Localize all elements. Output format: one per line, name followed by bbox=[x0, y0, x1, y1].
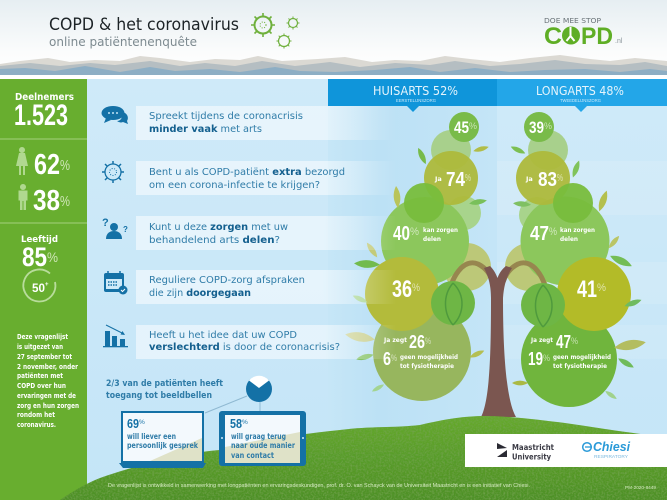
tree: left canopy circles bbox=[365, 112, 491, 401]
chart values: longarts: 47 bbox=[530, 223, 549, 245]
chart values: longarts: geen mogelijkheid bbox=[553, 353, 611, 361]
tablet: oude manier van contact: naar oude manier bbox=[231, 441, 295, 450]
logo: doe mee stop COPD: C bbox=[544, 23, 562, 50]
stat: women: 62 bbox=[34, 149, 60, 181]
text block: survey description: 27 september tot bbox=[17, 353, 73, 361]
icon: person with question marks bbox=[102, 217, 128, 239]
tree: green inner circles bbox=[431, 281, 565, 327]
chart values: longarts: Ja bbox=[525, 175, 533, 183]
chart values: longarts: 83 bbox=[538, 169, 557, 191]
logo: Chiesi Respiratory bbox=[583, 439, 630, 459]
chart values: huisarts: 40 bbox=[393, 223, 410, 245]
tablet: oude manier van contact: % bbox=[242, 419, 248, 426]
question band: 5 bbox=[136, 325, 396, 359]
question band: 2: om een corona-infectie te krijgen? bbox=[149, 180, 320, 191]
logo: doe mee stop COPD: .nl bbox=[615, 38, 623, 45]
tablet: oude manier van contact: van contact bbox=[231, 451, 274, 460]
title bbox=[49, 15, 239, 49]
panel: main background bbox=[87, 79, 667, 500]
question band: 4 bbox=[136, 270, 396, 304]
stat: age: % bbox=[47, 249, 58, 265]
text block: survey description: Deze vragenlijst bbox=[17, 333, 69, 341]
chart values: longarts: 19 bbox=[528, 349, 543, 369]
laptop: persoonlijk gesprek: persoonlijk gesprek bbox=[127, 441, 199, 450]
tablet: oude manier van contact: 58 bbox=[230, 416, 242, 431]
stat: age: + bbox=[45, 282, 49, 288]
stat: age: 85 bbox=[22, 242, 47, 272]
question band: 3: behandelend arts delen? bbox=[149, 235, 280, 246]
column header: huisarts bbox=[328, 79, 497, 112]
text block: survey description: patiënten met bbox=[17, 372, 64, 380]
laptop: persoonlijk gesprek: will liever een bbox=[127, 432, 176, 441]
stat: age: 50 bbox=[32, 281, 45, 295]
question band: 5: Heeft u het idee dat uw COPD bbox=[149, 330, 297, 341]
chart values: huisarts bbox=[383, 118, 477, 370]
question band: 2: Bent u als COPD-patiënt extra bezorgd bbox=[149, 167, 345, 178]
chart values: huisarts: % bbox=[425, 336, 431, 346]
chart values: huisarts: tot fysiotherapie bbox=[400, 362, 455, 370]
heading: video calling bbox=[106, 379, 223, 401]
question band: 4: die zijn doorgegaan bbox=[149, 288, 251, 299]
question band: 5: verslechterd is door de coronacrisis? bbox=[149, 342, 340, 353]
laptop: persoonlijk gesprek: % bbox=[139, 419, 145, 426]
chart values: longarts: 39 bbox=[529, 118, 544, 137]
question band: 1: minder vaak met arts bbox=[149, 124, 262, 135]
chart values: longarts: % bbox=[549, 226, 557, 238]
icon: envelope circle with connectors bbox=[205, 376, 272, 413]
chart values: huisarts: % bbox=[469, 121, 477, 131]
logo: Chiesi Respiratory: RESPIRATORY bbox=[594, 454, 628, 459]
icon: declining bar chart bbox=[103, 325, 128, 347]
text block: survey description: 2 november, onder bbox=[17, 363, 78, 371]
stat: men: % bbox=[60, 193, 70, 210]
stat: age: Leeftijd bbox=[21, 235, 58, 245]
chart values: longarts: 47 bbox=[556, 332, 571, 352]
chart values: huisarts: delen bbox=[423, 235, 441, 243]
icon: speech bubbles bbox=[102, 106, 128, 124]
logo: doe mee stop COPD: PD bbox=[581, 23, 613, 50]
tree: leaves bbox=[344, 144, 647, 401]
stat: women: % bbox=[60, 157, 70, 174]
question band: 3 bbox=[136, 216, 396, 250]
icon: green viruses bbox=[251, 13, 300, 48]
chart values: longarts: % bbox=[543, 353, 550, 363]
question band: 1 bbox=[136, 106, 396, 140]
text block: survey description: ervaringen met de bbox=[17, 392, 76, 400]
stat: participants: 1.523 bbox=[14, 99, 68, 132]
text block: survey description: rondom het bbox=[17, 411, 56, 419]
logo: Chiesi Respiratory: Chiesi bbox=[593, 439, 630, 454]
heading: video calling: toegang tot beeldbellen bbox=[106, 391, 212, 401]
tree: right canopy circles bbox=[505, 112, 631, 407]
question band: 1: Spreekt tijdens de coronacrisis bbox=[149, 111, 303, 122]
chart values: huisarts: kan zorgen bbox=[423, 226, 458, 234]
chart values: longarts bbox=[525, 118, 611, 370]
logo: Maastricht University bbox=[497, 443, 554, 462]
stat: men bbox=[18, 184, 70, 217]
header background with mountains bbox=[0, 0, 667, 79]
column header: huisarts: EERSTELIJNSZORG bbox=[396, 98, 436, 103]
chart values: huisarts: Ja zegt bbox=[383, 336, 407, 344]
chart values: longarts: tot fysiotherapie bbox=[553, 362, 608, 370]
chart values: longarts: Ja zegt bbox=[530, 336, 553, 344]
stat: women bbox=[16, 147, 70, 181]
chart values: huisarts: geen mogelijkheid bbox=[400, 353, 458, 361]
column header: longarts: LONGARTS 48% bbox=[536, 83, 624, 98]
icon: calendar bbox=[104, 271, 128, 294]
laptop: persoonlijk gesprek: 69 bbox=[127, 416, 139, 431]
chart values: longarts: % bbox=[557, 173, 563, 184]
chart values: huisarts: 36 bbox=[392, 276, 412, 303]
text block: survey description: is uitgezet van bbox=[17, 343, 63, 351]
panel: partner logos bbox=[465, 434, 667, 467]
footer text: De vragenlijst is ontwikkeld in samenwerking met longpatiënten en ervaringsdeskundigen, prof. dr. O. van Schayck van de Universiteit Maastricht en is een initiatief van Chiesi. bbox=[108, 483, 530, 489]
icon: virus bbox=[102, 161, 124, 183]
chart values: longarts: delen bbox=[560, 235, 578, 243]
heading: video calling: 2/3 van de patiënten heeft bbox=[106, 379, 223, 389]
chart values: huisarts: 6 bbox=[383, 349, 391, 369]
column header: huisarts: HUISARTS 52% bbox=[373, 83, 458, 98]
chart values: longarts: % bbox=[597, 282, 606, 294]
text block: survey description: zorg en hun zorgen bbox=[17, 402, 79, 410]
question band: 4: Reguliere COPD-zorg afspraken bbox=[149, 275, 305, 286]
text block: survey description: COPD over hun bbox=[17, 382, 66, 390]
chart values: huisarts: Ja bbox=[434, 175, 442, 183]
footer text bbox=[108, 483, 656, 491]
column header: longarts: TWEEDELIJNSZORG bbox=[560, 98, 601, 103]
stat: participants: Deelnemers bbox=[15, 92, 74, 103]
chart values: huisarts: 26 bbox=[409, 332, 425, 352]
chart values: huisarts: % bbox=[410, 226, 419, 238]
column header: longarts bbox=[497, 79, 667, 112]
logo: Maastricht University: University bbox=[512, 452, 552, 462]
icon: person with question marks: ? bbox=[123, 225, 128, 234]
question band: 3: Kunt u deze zorgen met uw bbox=[149, 222, 288, 233]
tablet: oude manier van contact bbox=[219, 411, 306, 466]
stat: men: 38 bbox=[33, 185, 60, 217]
text block: survey description bbox=[17, 333, 79, 429]
chart values: longarts: 41 bbox=[577, 276, 597, 303]
logo: doe mee stop COPD bbox=[544, 17, 623, 50]
text block: survey description: coronavirus. bbox=[17, 421, 56, 429]
title: online patiëntenenquête bbox=[49, 34, 197, 49]
chart values: longarts: % bbox=[544, 121, 552, 131]
chart values: huisarts: % bbox=[412, 282, 420, 294]
panel: sidebar bbox=[0, 79, 87, 500]
chart values: huisarts: 45 bbox=[454, 118, 469, 137]
laptop: persoonlijk gesprek bbox=[119, 412, 206, 468]
chart values: huisarts: 74 bbox=[446, 169, 466, 191]
chart values: huisarts: % bbox=[391, 353, 397, 363]
stat: participants bbox=[14, 92, 74, 132]
grass hill bbox=[60, 416, 667, 500]
logo: Maastricht University: Maastricht bbox=[512, 443, 554, 452]
question band: 2 bbox=[136, 161, 396, 195]
tree: trunk and branches bbox=[448, 263, 548, 417]
chart values: longarts: kan zorgen bbox=[560, 226, 595, 234]
chart values: huisarts: % bbox=[465, 173, 471, 184]
chart values: longarts: % bbox=[571, 336, 578, 346]
stat: age bbox=[21, 235, 58, 301]
title: COPD & het coronavirus bbox=[49, 15, 239, 35]
logo: doe mee stop COPD: DOE MEE STOP bbox=[544, 17, 601, 25]
tablet: oude manier van contact: will graag terug bbox=[231, 432, 286, 441]
icon: person with question marks: ? bbox=[102, 217, 109, 229]
footer text: PM-2020-8449 bbox=[625, 485, 656, 491]
